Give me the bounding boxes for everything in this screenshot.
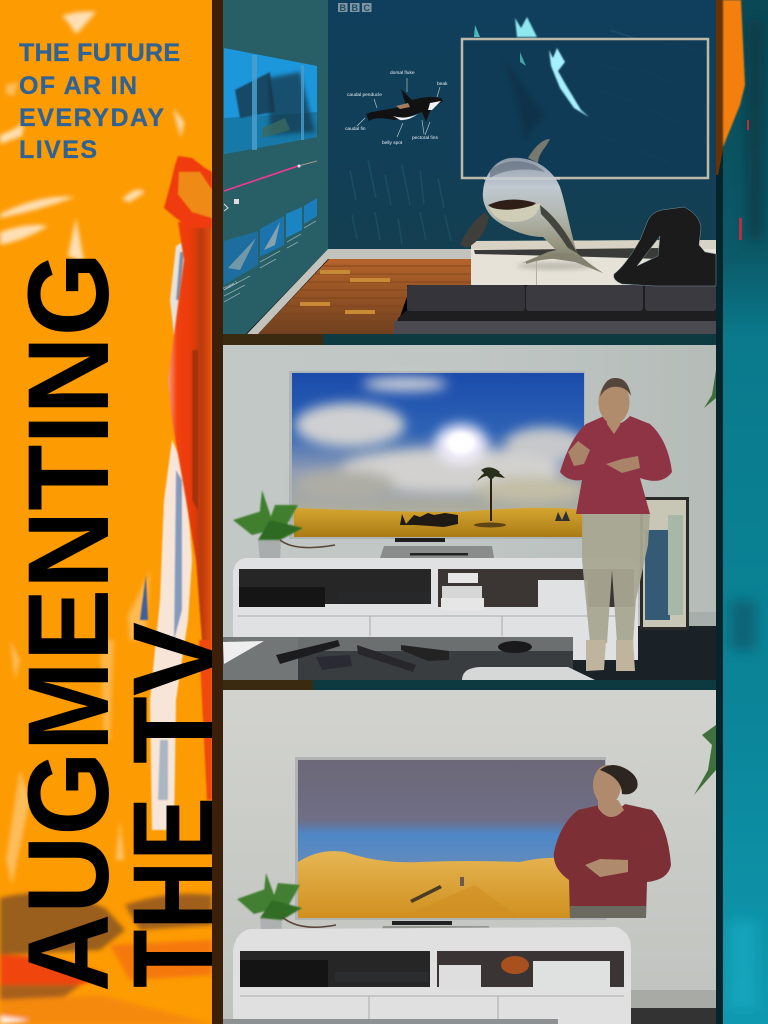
panel: orange paint background <box>0 0 212 1024</box>
divider: strip between photo 1 and photo 2 <box>223 334 716 345</box>
panel: photo 1, augmented living room <box>223 0 716 334</box>
title: AUGMENTING THE TV: AUGMENTING <box>5 252 133 992</box>
plant with pot <box>233 490 335 561</box>
fish school <box>350 30 695 244</box>
episode thumbnails: Chapter 1 <box>223 280 238 291</box>
orca diagram <box>345 70 448 146</box>
baseboard <box>247 249 472 334</box>
orca diagram: pectoral fins <box>412 135 438 141</box>
TV cabinet <box>233 558 638 660</box>
divider: dark strip left of panels <box>212 0 223 1024</box>
orca diagram: dorsal fluke <box>390 70 415 76</box>
title: AUGMENTING THE TV: THE <box>110 797 238 988</box>
wall screen: divers <box>224 48 317 154</box>
orca diagram: caudal penducle <box>347 92 382 98</box>
presenter in red top <box>554 765 671 918</box>
side wall <box>223 0 328 334</box>
TV screen: sunny desert <box>289 371 585 539</box>
window frame showing orca swimming <box>462 17 708 178</box>
plant with pot <box>237 873 336 941</box>
TV cabinet <box>233 927 631 1024</box>
dolphin <box>460 139 603 273</box>
presenter in red top <box>560 378 672 671</box>
palm tree <box>477 467 505 521</box>
back wall: ocean <box>328 0 716 258</box>
subtitle <box>19 39 180 164</box>
subtitle: LIVES <box>19 136 97 164</box>
episode thumbnails <box>223 198 317 302</box>
wood floor <box>258 259 472 334</box>
TV stand <box>380 538 494 558</box>
title: AUGMENTING THE TV: TV <box>110 622 238 764</box>
framed poster <box>640 497 689 630</box>
coffee table edge <box>223 1019 558 1024</box>
divider: strip between photo 2 and photo 3 <box>223 680 716 690</box>
logo: BBC: C <box>364 3 370 13</box>
panel: right teal paint strip <box>716 0 768 1024</box>
panel: photo 3, presenter beside TV with sand dunes <box>223 690 716 1024</box>
paint streak: red <box>164 156 212 800</box>
TV screen: dune sunset <box>295 757 606 920</box>
orca diagram: belly spot <box>382 140 403 146</box>
orca diagram: caudal fin <box>345 126 366 132</box>
logo: BBC <box>338 3 372 13</box>
sofa <box>394 285 716 334</box>
white console <box>471 240 716 285</box>
logo: BBC: B <box>352 3 358 13</box>
TV stand <box>379 921 492 940</box>
plant edge <box>704 370 716 408</box>
subtitle: EVERYDAY <box>19 104 164 132</box>
plant edge <box>694 725 716 795</box>
viewer silhouette <box>614 207 716 286</box>
progress bar <box>224 161 317 211</box>
glass table with remotes <box>223 637 595 680</box>
panel: photo 2, presenter beside TV with palm desert <box>223 345 716 680</box>
paint streak: white and blue <box>140 240 192 830</box>
camel caravan <box>400 513 458 527</box>
logo: BBC: B <box>340 3 346 13</box>
paint band: bottom red-orange <box>0 893 212 1024</box>
subtitle: OF AR IN <box>19 72 137 100</box>
orca diagram: beak <box>437 81 448 87</box>
title: AUGMENTING THE TV <box>5 252 238 992</box>
subtitle: THE FUTURE <box>19 39 180 67</box>
